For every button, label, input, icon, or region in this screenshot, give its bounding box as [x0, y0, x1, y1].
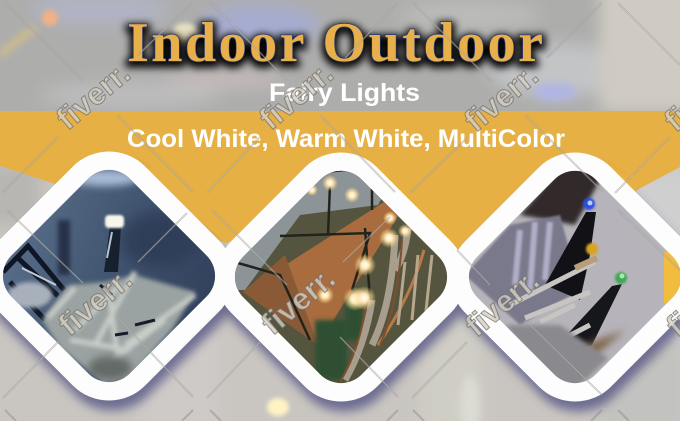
diamond shadows	[0, 140, 680, 421]
colour options heading: Cool White, Warm White, MultiColor	[127, 125, 565, 153]
photo frame: warm white	[224, 152, 458, 402]
photo frame: cool white	[0, 152, 226, 400]
title: Indoor Outdoor	[127, 12, 543, 74]
watermark text: fiverr.	[459, 262, 546, 344]
photo: warm white lights on railing	[234, 170, 448, 384]
watermark text: fiverr.	[458, 57, 545, 139]
gold banner top layer over shadows	[140, 120, 640, 250]
watermark text: fiverr.	[255, 260, 342, 342]
watermark text	[50, 55, 680, 344]
gold banner	[0, 111, 680, 250]
photo: blue, yellow and green LEDs	[465, 165, 680, 390]
photo frame: multicolor	[458, 152, 680, 402]
photo: cool white LED on frosted branch	[0, 165, 220, 390]
watermark text: fiverr.	[50, 55, 137, 137]
subtitle: Fairy Lights	[269, 79, 420, 107]
watermark text: fiverr.	[52, 261, 139, 343]
watermark text: fiverr.	[253, 55, 340, 137]
title: Indoor Outdoor	[127, 15, 543, 77]
